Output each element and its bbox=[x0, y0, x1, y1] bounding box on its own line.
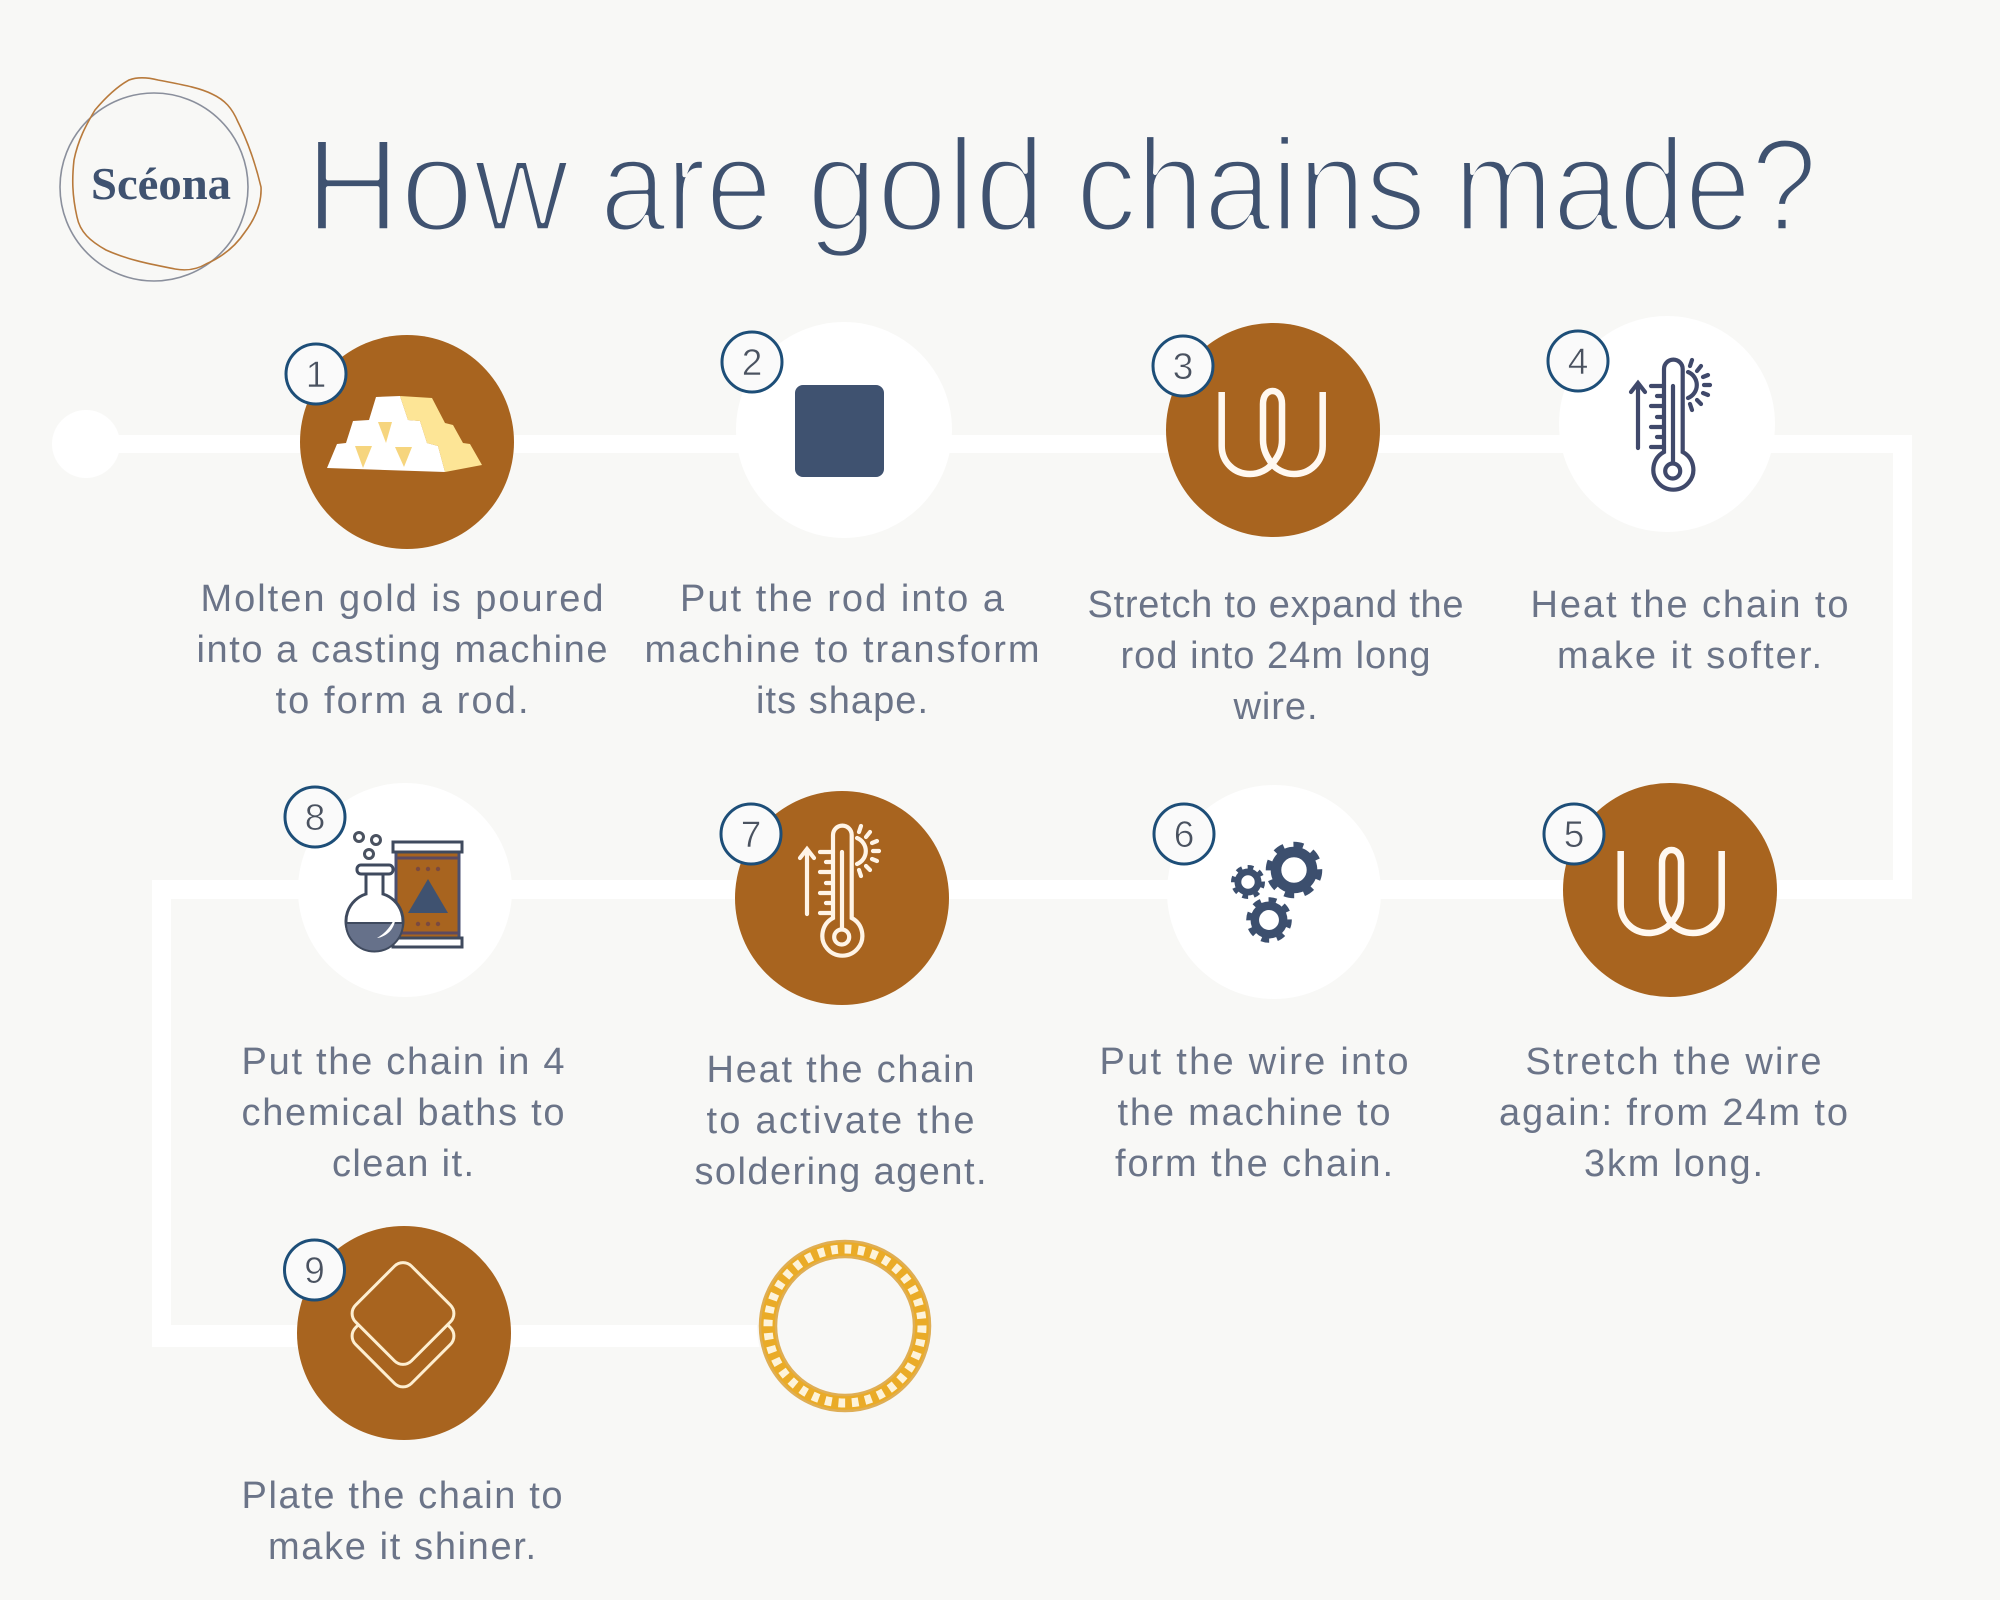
text: step 7: to activate the bbox=[706, 1100, 974, 1142]
text: step 6: Put the wire into bbox=[1100, 1041, 1408, 1083]
step 3 circle bbox=[1166, 323, 1380, 537]
text: step 9: make it shiner. bbox=[268, 1526, 536, 1568]
text: step 1: into a casting machine bbox=[196, 629, 608, 671]
step 9 circle bbox=[297, 1226, 511, 1440]
logo bbox=[60, 78, 261, 281]
text: step 2: machine to transform bbox=[644, 629, 1040, 671]
text: step 4: make it softer. bbox=[1557, 635, 1822, 677]
text: step 8: chemical baths to bbox=[242, 1092, 564, 1134]
icon: gold bars bbox=[327, 396, 482, 472]
badge 3 bbox=[1153, 336, 1213, 396]
badge 9 bbox=[284, 1240, 344, 1300]
badge 7: 7 bbox=[741, 814, 761, 855]
text: step 9: Plate the chain to bbox=[242, 1475, 562, 1517]
step 7 circle bbox=[735, 791, 949, 1005]
text: step 5: Stretch the wire bbox=[1526, 1041, 1822, 1083]
icon: wire bbox=[1621, 850, 1722, 933]
text: step 2: Put the rod into a bbox=[680, 578, 1005, 620]
step 4 circle bbox=[1559, 316, 1775, 532]
text: step 5 bbox=[1499, 1041, 1848, 1185]
text: step 8: Put the chain in 4 bbox=[242, 1041, 564, 1083]
text: step 3: Stretch to expand the bbox=[1088, 584, 1464, 626]
step 8 circle bbox=[298, 783, 512, 997]
title: gold bbox=[807, 112, 1045, 258]
step 4 bbox=[1530, 316, 1848, 677]
step 8 bbox=[242, 783, 564, 1185]
badge 7 bbox=[721, 804, 781, 864]
text: step 6 bbox=[1100, 1041, 1408, 1185]
text: step 7 bbox=[694, 1049, 986, 1193]
title: are bbox=[600, 112, 772, 258]
text: step 5: 3km long. bbox=[1584, 1143, 1763, 1185]
badge 5 bbox=[1544, 804, 1604, 864]
icon: thermometer bbox=[1631, 360, 1710, 490]
text: step 2: its shape. bbox=[756, 680, 928, 722]
icon: flask and chemical box bbox=[346, 832, 462, 951]
icon: rod section bbox=[795, 385, 884, 477]
text: step 9 bbox=[242, 1475, 562, 1568]
text: step 7: Heat the chain bbox=[706, 1049, 974, 1091]
icon: gears bbox=[1233, 844, 1320, 940]
step 9 bbox=[242, 1226, 562, 1568]
step 7 bbox=[694, 791, 986, 1193]
step 1 bbox=[196, 335, 608, 722]
badge 4: 4 bbox=[1568, 341, 1588, 382]
text: step 1 bbox=[196, 578, 608, 722]
text: step 4: Heat the chain to bbox=[1530, 584, 1848, 626]
step 1 circle bbox=[300, 335, 514, 549]
badge 8: 8 bbox=[305, 797, 325, 838]
text: step 6: form the chain. bbox=[1115, 1143, 1393, 1185]
badge 8 bbox=[285, 787, 345, 847]
title bbox=[305, 112, 1817, 258]
badge 6: 6 bbox=[1174, 814, 1194, 855]
badge 5: 5 bbox=[1564, 814, 1584, 855]
badge 2: 2 bbox=[742, 342, 762, 383]
text: step 3: wire. bbox=[1232, 686, 1318, 728]
badge 4 bbox=[1548, 331, 1608, 391]
text: step 1: to form a rod. bbox=[276, 680, 528, 722]
process connector line bbox=[52, 410, 1912, 1347]
text: step 4 bbox=[1530, 584, 1848, 677]
step 2 bbox=[644, 322, 1040, 722]
text: step 3: rod into 24m long bbox=[1120, 635, 1430, 677]
icon: plating layers bbox=[347, 1258, 459, 1392]
text: step 8 bbox=[242, 1041, 564, 1185]
step 6 circle bbox=[1167, 785, 1381, 999]
badge 1 bbox=[286, 344, 346, 404]
logo: Scéona bbox=[91, 158, 231, 209]
badge 6 bbox=[1154, 804, 1214, 864]
text: step 7: soldering agent. bbox=[694, 1151, 986, 1193]
text: step 2 bbox=[644, 578, 1040, 722]
step 3 bbox=[1088, 323, 1464, 728]
step 5 bbox=[1499, 783, 1848, 1185]
icon: gold chain bbox=[760, 1241, 930, 1411]
title: chains bbox=[1076, 112, 1426, 258]
text: step 8: clean it. bbox=[332, 1143, 474, 1185]
title: made? bbox=[1454, 112, 1817, 258]
badge 2 bbox=[722, 332, 782, 392]
badge 3: 3 bbox=[1173, 346, 1193, 387]
step 5 circle bbox=[1563, 783, 1777, 997]
badge 9: 9 bbox=[304, 1250, 325, 1291]
title: How bbox=[305, 112, 570, 258]
icon: thermometer bbox=[800, 826, 879, 956]
icon: wire bbox=[1222, 391, 1323, 474]
badge 1: 1 bbox=[306, 354, 326, 395]
step 2 circle bbox=[736, 322, 952, 538]
text: step 6: the machine to bbox=[1118, 1092, 1390, 1134]
step 6 bbox=[1100, 785, 1408, 1185]
text: step 1: Molten gold is poured bbox=[200, 578, 604, 620]
text: step 5: again: from 24m to bbox=[1499, 1092, 1848, 1134]
text: step 3 bbox=[1088, 584, 1464, 728]
